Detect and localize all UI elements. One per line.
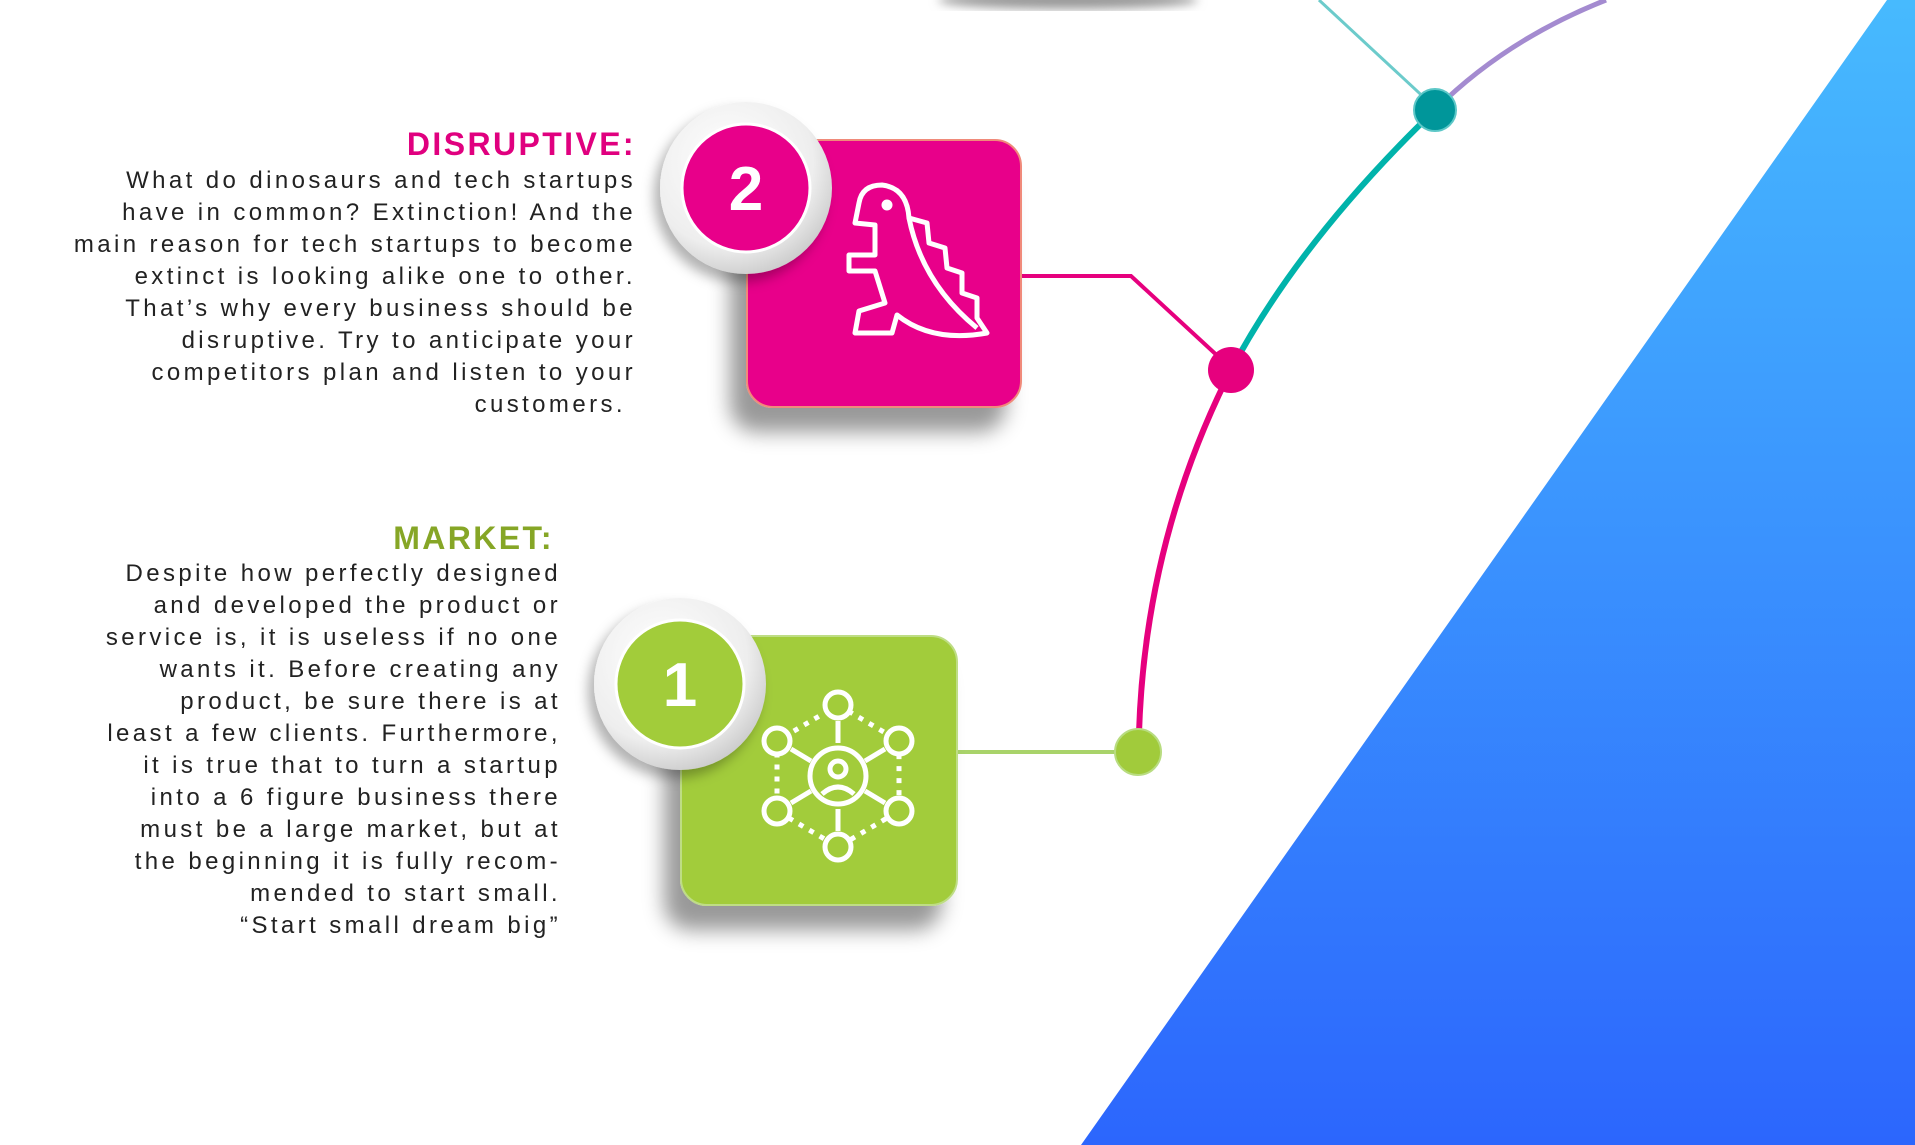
text: disruptive body: extinct is looking alike one to other. <box>135 263 636 290</box>
text: market body <box>106 560 561 939</box>
pink connector <box>1021 276 1222 360</box>
blue diagonal background <box>1081 0 1915 1145</box>
heading: market: MARKET: <box>393 520 554 556</box>
thin teal line <box>1319 0 1430 103</box>
text: market body: least a few clients. Furthermore, <box>107 720 561 747</box>
text: disruptive body: competitors plan and listen to your <box>151 359 636 386</box>
teal dot <box>1414 89 1456 131</box>
text: market body: into a 6 figure business there <box>151 784 561 811</box>
text: market body: and developed the product or <box>154 592 561 619</box>
green dot <box>1115 729 1161 775</box>
text: market body: wants it. Before creating any <box>160 656 561 683</box>
icon: dinosaur <box>849 185 987 336</box>
text: disruptive body: disruptive. Try to anticipate your <box>182 327 636 354</box>
text: disruptive body <box>74 167 636 418</box>
text: disruptive body: customers. <box>475 391 626 418</box>
icon: network <box>764 692 912 860</box>
card 1: market <box>594 598 957 905</box>
text: market body: “Start small dream big” <box>240 912 561 939</box>
text: disruptive body: main reason for tech startups to become <box>74 231 636 258</box>
heading: disruptive: DISRUPTIVE: <box>407 126 636 162</box>
text: disruptive body: have in common? Extinction! And the <box>122 199 636 226</box>
pink arc <box>1139 370 1231 733</box>
text: market body: the beginning it is fully recom- <box>135 848 561 875</box>
badge 2 <box>660 102 832 274</box>
text: market body: service is, it is useless if no one <box>106 624 561 651</box>
green connector <box>957 750 1138 754</box>
text: market body: must be a large market, but at <box>140 816 561 843</box>
badge 1 <box>594 598 766 770</box>
text: disruptive body: What do dinosaurs and tech startups <box>126 167 636 194</box>
text: market body: mended to start small. <box>250 880 561 907</box>
text: market body: product, be sure there is at <box>180 688 561 715</box>
purple line <box>1435 0 1606 110</box>
text: market body: it is true that to turn a startup <box>143 752 561 779</box>
card 2: disruptive <box>660 102 1021 407</box>
text: market body: Despite how perfectly designed <box>125 560 561 587</box>
pink dot <box>1208 347 1254 393</box>
badge 2: 2 <box>729 155 763 224</box>
badge 1: 1 <box>663 651 697 720</box>
top card shadow <box>938 0 1198 9</box>
teal arc <box>1231 110 1435 370</box>
text: disruptive body: That’s why every business should be <box>125 295 636 322</box>
